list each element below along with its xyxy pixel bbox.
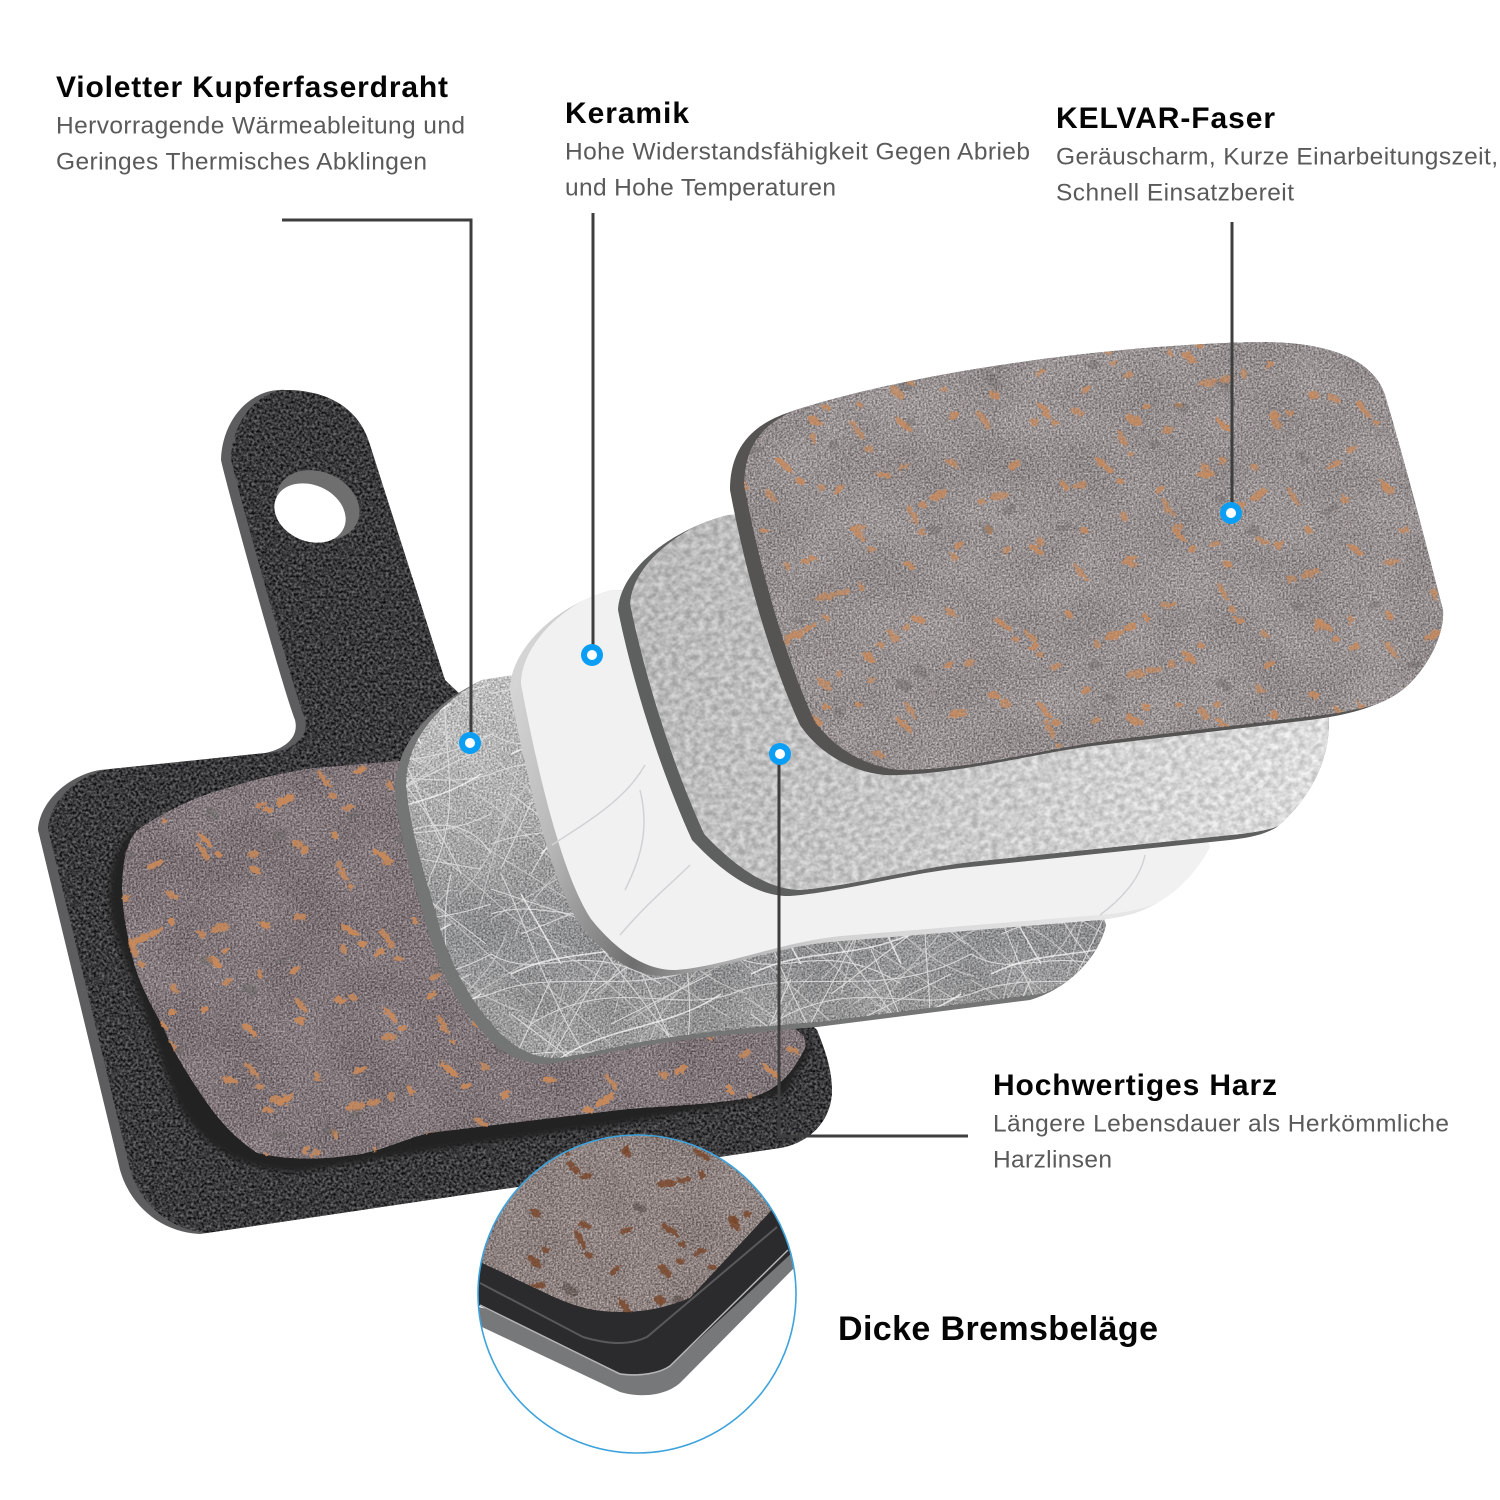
layer: ceramic	[510, 584, 1221, 976]
text block: resin	[993, 1069, 1449, 1174]
magnifier ring	[478, 1135, 796, 1453]
dark rubber band	[470, 1200, 795, 1374]
heading: thick pads: Dicke Bremsbeläge	[838, 1310, 1158, 1348]
text block: copper fibre: Violetter Kupferfaserdraht	[56, 71, 448, 104]
leader line: ceramic	[592, 213, 594, 655]
marker dot: resin	[769, 743, 791, 765]
leader line: kelvar	[1230, 222, 1234, 513]
text block: ceramic: Hohe Widerstandsfähigkeit Gegen Abrieb	[565, 138, 1030, 166]
band groove highlights	[480, 1227, 788, 1375]
marker dot: copper fibre	[459, 732, 481, 754]
leader line: copper fibre	[282, 220, 471, 742]
leader line: resin	[779, 755, 968, 1136]
text block: kelvar: Geräuscharm, Kurze Einarbeitungszeit,	[1056, 144, 1498, 170]
text block: kelvar	[1056, 102, 1498, 206]
text block: ceramic: Keramik	[565, 97, 689, 130]
layer: kelvar fibre friction surface	[730, 337, 1457, 775]
marker dot: kelvar	[1220, 502, 1242, 524]
text block: resin: Hochwertiges Harz	[993, 1069, 1277, 1102]
text block: ceramic	[565, 97, 1030, 202]
text block: resin: Harzlinsen	[993, 1146, 1112, 1174]
friction pad on plate	[110, 755, 810, 1172]
layer: violet copper fibre	[395, 675, 1106, 1064]
text block: copper fibre	[56, 71, 465, 176]
marker dot: ceramic	[581, 644, 603, 666]
layer: resin	[618, 494, 1341, 896]
text block: kelvar: KELVAR-Faser	[1056, 102, 1275, 135]
magnifier detail: thick pad	[478, 1136, 794, 1396]
plate mounting hole	[265, 457, 371, 554]
backing edge	[478, 1245, 797, 1395]
brake pad backing plate	[38, 389, 842, 1234]
text block: copper fibre: Hervorragende Wärmeableitung und	[56, 112, 465, 140]
magnified friction surface	[482, 1136, 771, 1312]
text block: ceramic: und Hohe Temperaturen	[565, 174, 836, 202]
text block: copper fibre: Geringes Thermisches Abklingen	[56, 148, 427, 176]
text block: kelvar: Schnell Einsatzbereit	[1056, 180, 1294, 206]
text block: resin: Längere Lebensdauer als Herkömmliche	[993, 1110, 1449, 1138]
